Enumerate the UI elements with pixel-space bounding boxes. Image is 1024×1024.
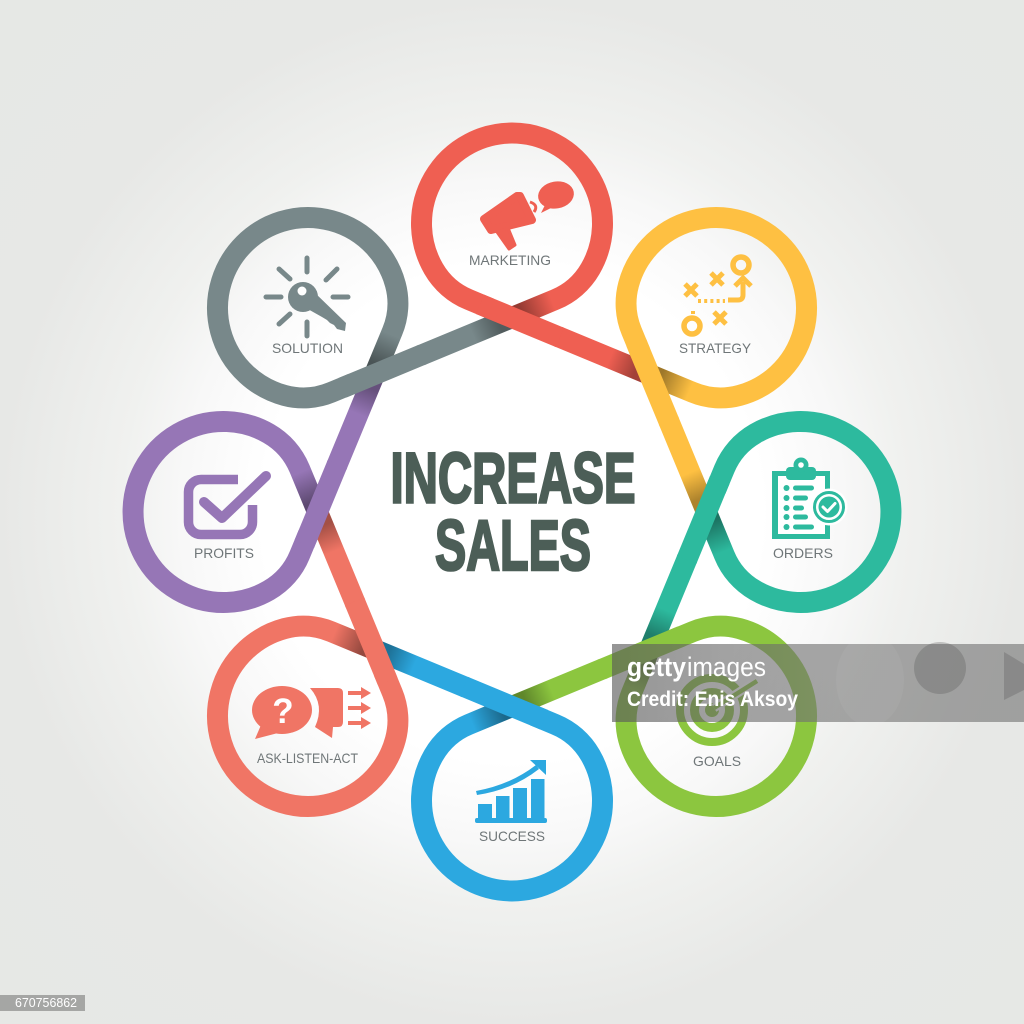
- icon: growth chart: [475, 760, 547, 823]
- icon: key with rays: [266, 258, 348, 336]
- icon: clipboard with check: [772, 458, 848, 539]
- label: PROFITS: [194, 545, 254, 561]
- ring: orders: [650, 422, 891, 650]
- watermark credit: Credit: Enis Aksoy: [627, 688, 798, 711]
- ring: solution: [180, 147, 512, 479]
- label: SOLUTION: [272, 340, 343, 356]
- step: ask-listen-act: [252, 686, 371, 766]
- watermark brand: getty: [627, 652, 686, 682]
- label: ASK-LISTEN-ACT: [257, 750, 358, 766]
- ring: strategy: [545, 180, 877, 512]
- step: strategy: [679, 257, 752, 356]
- label: MARKETING: [469, 252, 551, 268]
- watermark banner: [612, 634, 1024, 726]
- step: orders: [772, 458, 848, 561]
- label: SUCCESS: [479, 828, 545, 844]
- title line 2: SALES: [435, 507, 591, 586]
- icon: target: [680, 678, 757, 742]
- step: profits: [188, 476, 266, 561]
- ring: goals: [512, 545, 844, 877]
- ring: profits: [133, 374, 374, 602]
- icon: play diagram: [684, 257, 751, 334]
- image id tag: 670756862: [15, 996, 77, 1010]
- step: goals: [680, 678, 757, 769]
- icon: speech bubbles and arrows: ?: [272, 692, 294, 731]
- ribbon crossings: top layer of each tail: [304, 304, 720, 720]
- icon: megaphone: [484, 179, 576, 249]
- ring: marketing: [422, 133, 650, 374]
- watermark brand: [627, 652, 766, 682]
- title: [390, 440, 636, 586]
- step: success: [475, 760, 547, 844]
- title line 1: INCREASE: [390, 440, 636, 519]
- watermark brand: images: [687, 652, 766, 682]
- label: STRATEGY: [679, 340, 752, 356]
- ring: success: [374, 650, 602, 891]
- image id tag: [0, 995, 85, 1011]
- label: GOALS: [693, 753, 741, 769]
- step: marketing: [469, 179, 576, 268]
- label: ORDERS: [773, 545, 833, 561]
- icon: checkbox: [188, 476, 266, 534]
- step: solution: [266, 258, 348, 356]
- ring: ask-listen-act: [147, 512, 479, 844]
